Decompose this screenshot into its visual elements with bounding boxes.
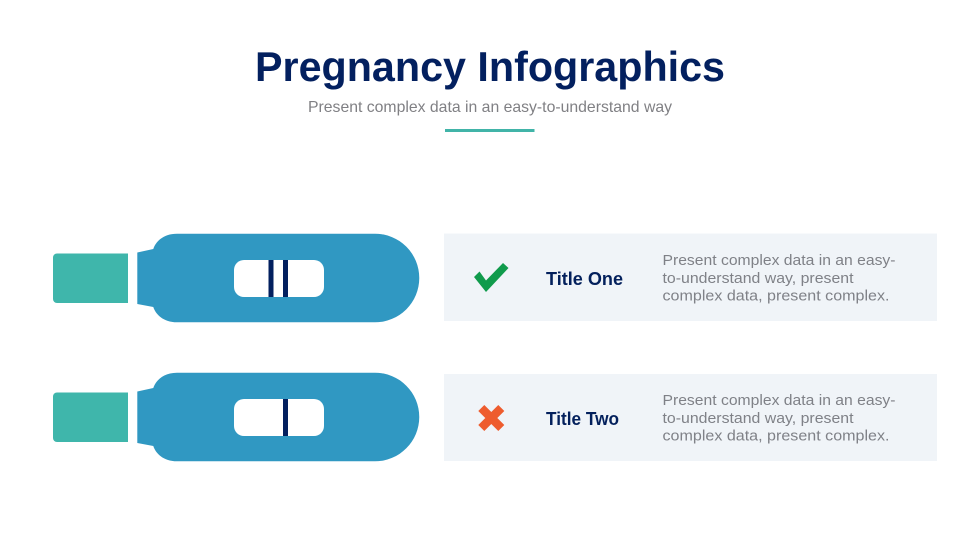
one result line: [283, 399, 288, 436]
body text: Present complex data in an easy-: [662, 392, 896, 409]
panel background: [444, 234, 937, 321]
result window: [234, 399, 324, 436]
two result lines: [268, 260, 288, 297]
body text: to-understand way, present: [662, 270, 854, 287]
pregnancy test: positive: [53, 234, 419, 322]
title: Pregnancy Infographics: [255, 43, 725, 90]
test cap: [53, 254, 128, 303]
body text: to-understand way, present: [662, 410, 854, 427]
panel: title one: [444, 234, 937, 321]
test body: [137, 234, 419, 322]
panel background: [444, 374, 937, 461]
body text: complex data, present complex.: [662, 428, 890, 444]
icon: check mark: [474, 263, 508, 292]
heading: title one: Title One: [546, 269, 623, 289]
icon: cross mark: [481, 408, 501, 428]
body text: complex data, present complex.: [662, 288, 890, 304]
test cap: [53, 392, 128, 442]
test body: [137, 373, 419, 461]
body text: Present complex data in an easy-: [662, 252, 896, 269]
result window: [234, 260, 324, 297]
pregnancy test: negative: [53, 373, 419, 461]
title underline: [445, 129, 534, 132]
panel: title two: [444, 374, 937, 461]
heading: title two: Title Two: [546, 409, 619, 429]
subtitle: Present complex data in an easy-to-understand way: [308, 99, 672, 116]
